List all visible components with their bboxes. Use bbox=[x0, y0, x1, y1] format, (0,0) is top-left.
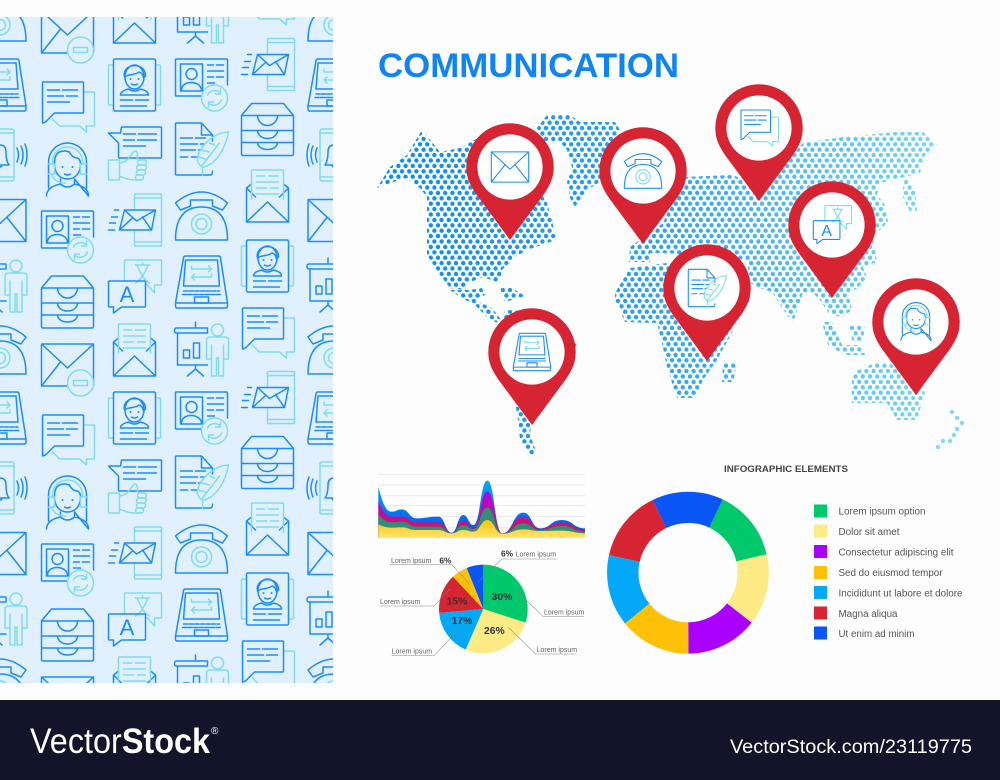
donut chart bbox=[607, 492, 769, 654]
pin: document and quill bbox=[663, 244, 751, 361]
legend: Sed do eiusmod tempor bbox=[838, 568, 943, 579]
pin: translation bbox=[788, 181, 876, 298]
lorem ipsum labels: Lorem ipsum bbox=[380, 599, 421, 606]
legend: Consectetur adipiscing elit bbox=[838, 548, 954, 558]
lorem ipsum labels: Lorem ipsum bbox=[516, 552, 556, 559]
percent labels: 30% bbox=[492, 592, 512, 603]
percent labels: 6% bbox=[439, 555, 452, 565]
percent labels bbox=[439, 549, 514, 637]
legend: Lorem ipsum option bbox=[838, 506, 926, 518]
pin: envelope bbox=[466, 123, 554, 240]
pin: chat bubbles bbox=[715, 84, 803, 201]
percent labels: 6% bbox=[501, 549, 514, 559]
lorem ipsum labels bbox=[380, 552, 585, 656]
dotted world map bbox=[373, 117, 965, 452]
lorem ipsum labels: Lorem ipsum bbox=[391, 558, 432, 565]
registered mark: ® bbox=[211, 726, 219, 737]
slice: light blue 17% bbox=[439, 609, 483, 650]
legend: Ut enim ad minim bbox=[838, 629, 914, 640]
pin: laptop bbox=[488, 308, 576, 425]
pin: telephone bbox=[599, 127, 687, 244]
legend: Dolor sit amet bbox=[838, 527, 900, 538]
slice: green 30% bbox=[483, 565, 528, 623]
pin: support agent bbox=[872, 278, 960, 395]
slice: blue 6% bbox=[467, 565, 483, 609]
legend: Magna aliqua bbox=[838, 609, 898, 620]
lorem ipsum labels: Lorem ipsum bbox=[392, 649, 432, 656]
leader lines bbox=[380, 559, 584, 656]
pie chart bbox=[380, 549, 585, 656]
panel: icon pattern bbox=[0, 17, 333, 683]
slice: yellow 26% bbox=[466, 609, 525, 653]
percent labels: 15% bbox=[447, 596, 467, 607]
title: COMMUNICATION bbox=[378, 47, 679, 85]
heading: infographic elements: INFOGRAPHIC ELEMENTS bbox=[724, 464, 848, 475]
percent labels: 26% bbox=[484, 626, 505, 637]
footer logo: VectorStock bbox=[30, 722, 210, 761]
slice: orange 6% bbox=[453, 568, 483, 609]
lorem ipsum labels: Lorem ipsum bbox=[544, 610, 585, 617]
footer band bbox=[0, 700, 1000, 780]
footer image id: VectorStock.com/23119775 bbox=[730, 736, 972, 758]
stacked area chart bbox=[378, 474, 585, 538]
legend: Incididunt ut labore et dolore bbox=[838, 588, 963, 600]
lorem ipsum labels: Lorem ipsum bbox=[537, 647, 577, 654]
legend bbox=[814, 504, 963, 640]
percent labels: 17% bbox=[452, 616, 472, 627]
slice: red 15% bbox=[439, 577, 483, 613]
